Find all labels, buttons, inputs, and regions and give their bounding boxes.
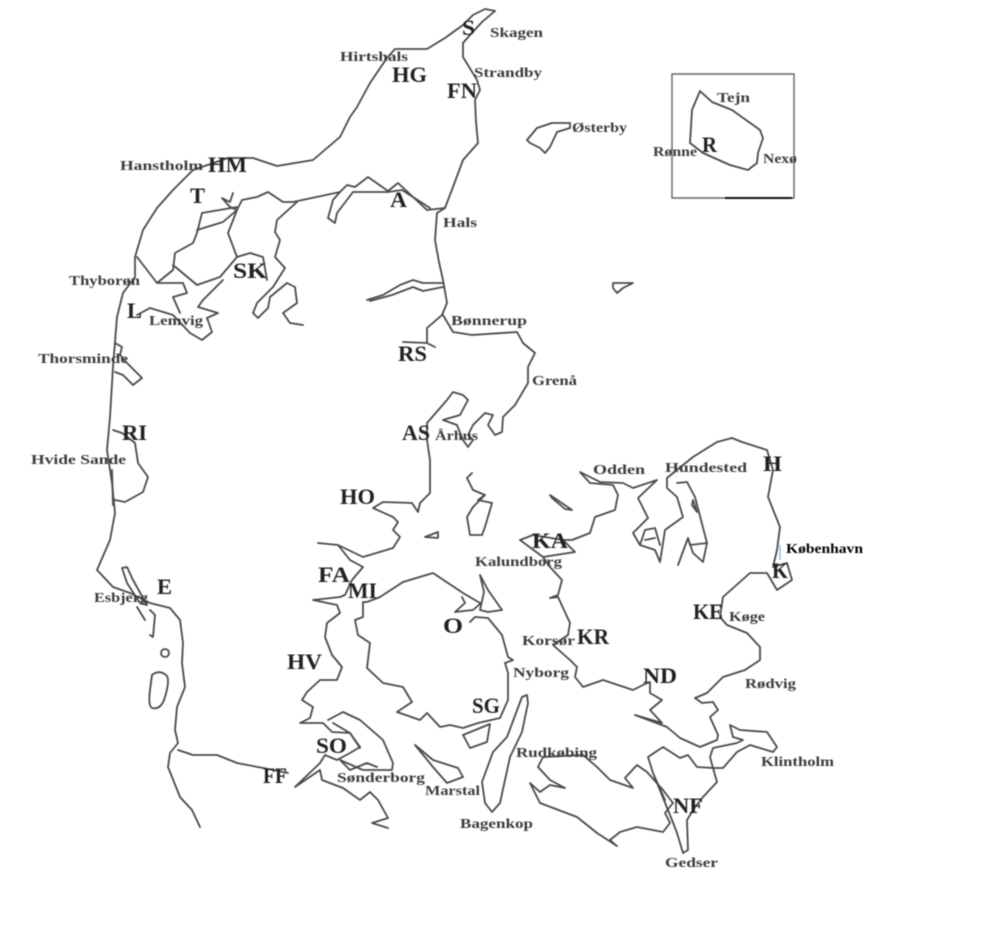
region codes: AS — [402, 420, 430, 445]
place names — [31, 26, 834, 871]
place names: Hundested — [665, 461, 747, 476]
region codes: RI — [122, 420, 147, 445]
region codes: SG — [472, 693, 500, 718]
place names: Køge — [729, 610, 765, 625]
place names: Rudkøbing — [516, 746, 597, 761]
place names: Hvide Sande — [31, 453, 126, 468]
place names: Hals — [443, 216, 478, 231]
place names: Nyborg — [513, 666, 569, 681]
region codes: H — [763, 451, 782, 476]
region codes: L — [127, 298, 142, 323]
region codes: FA — [318, 562, 350, 587]
region codes: T — [190, 183, 205, 208]
Copenhagen tick — [779, 545, 781, 560]
place names: Esbjerg — [94, 591, 148, 606]
region codes: KR — [577, 624, 610, 649]
coastlines: Jutland — [97, 9, 535, 828]
place names: Hirtshals — [340, 50, 409, 65]
place names: Grenå — [532, 374, 577, 389]
region codes: SO — [316, 733, 347, 758]
København label: København — [786, 542, 863, 557]
region codes: O — [443, 613, 463, 638]
place names: Nexø — [763, 152, 797, 167]
region codes: FN — [447, 78, 477, 103]
region codes: HG — [392, 62, 427, 87]
region codes: RS — [398, 341, 427, 366]
region codes — [122, 15, 788, 818]
place names: Hanstholm — [120, 159, 203, 174]
place names: Odden — [593, 463, 645, 478]
region codes: SK — [233, 258, 267, 283]
place names: Thyborøn — [69, 274, 140, 289]
region codes: KE — [693, 599, 723, 624]
region codes: A — [390, 187, 407, 212]
place names: Rødvig — [745, 677, 796, 692]
place names: Marstal — [425, 784, 480, 799]
place names: Skagen — [490, 26, 543, 41]
region codes: FF — [263, 763, 287, 788]
region codes: MI — [348, 578, 377, 603]
place names: Sønderborg — [337, 771, 425, 786]
place names: Rønne — [653, 145, 697, 160]
lakes in south Jutland — [149, 649, 169, 708]
Zealand — [520, 438, 792, 747]
region codes: HM — [208, 152, 247, 177]
region codes: K — [772, 558, 788, 583]
region codes: NF — [673, 793, 703, 818]
place names: Klintholm — [761, 755, 834, 770]
region codes: HV — [287, 649, 322, 674]
place names: Bagenkop — [460, 817, 533, 832]
place names: Gedser — [665, 856, 718, 871]
region codes: HO — [340, 484, 375, 509]
islands — [355, 123, 777, 853]
place names: Korsør — [522, 634, 575, 649]
place names: Lemvig — [149, 314, 203, 329]
place names: Kalundborg — [475, 555, 562, 570]
place names: Østerby — [572, 121, 627, 136]
region codes: S — [462, 15, 475, 40]
region codes: E — [157, 574, 172, 599]
place names: Bønnerup — [451, 314, 527, 329]
place names: Tejn — [717, 91, 750, 106]
region codes: R — [702, 132, 718, 157]
place names: Strandby — [474, 66, 542, 81]
region codes: KA — [532, 528, 568, 553]
place names: Thorsminde — [38, 352, 128, 367]
region codes: ND — [643, 663, 677, 688]
inset frame: Bornholm — [672, 74, 794, 198]
place names: Århus — [435, 428, 479, 444]
